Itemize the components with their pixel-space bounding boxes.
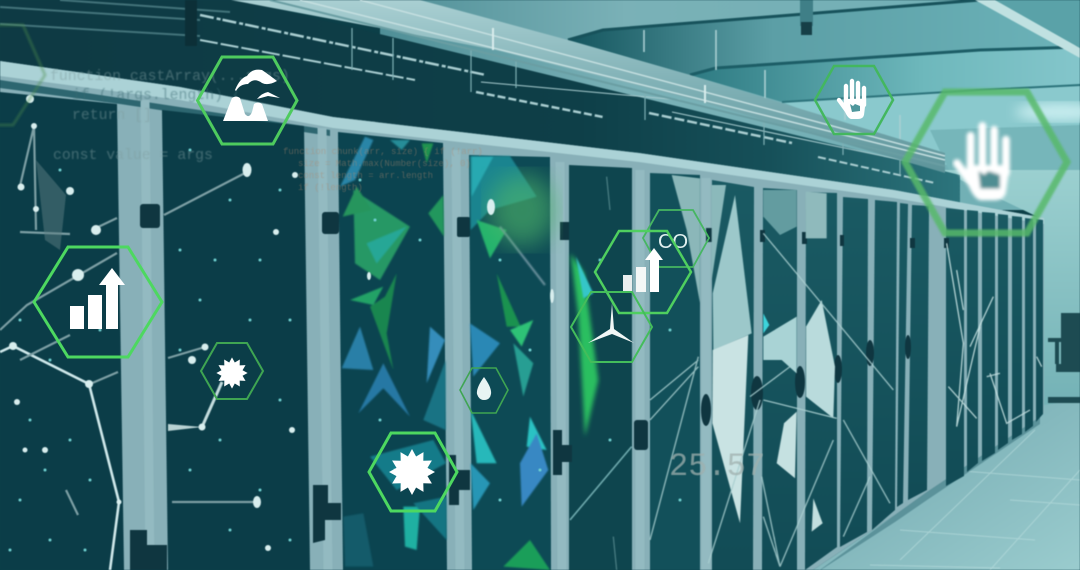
icon: sun hexagon large <box>369 433 457 511</box>
cable tray <box>231 0 945 173</box>
cabinet panel 1 <box>0 92 124 570</box>
code text overlay: return [] <box>72 108 152 124</box>
polygon art: panel 3 shards <box>340 137 447 567</box>
small code block: if (!length) <box>298 183 363 193</box>
constellation: stars and lines <box>0 95 682 570</box>
faded hexagon top left <box>0 25 45 125</box>
top left beams <box>0 0 230 36</box>
dark zone under cable tray <box>0 0 960 205</box>
icon: CO hexagon <box>643 210 709 267</box>
icon: hand hexagon small <box>815 66 893 134</box>
cabinet panel 2 <box>162 110 310 570</box>
cable trays and brackets <box>200 15 940 183</box>
icon: sun hexagon small <box>201 343 263 399</box>
icon: CO hexagon: CO <box>658 231 688 253</box>
back wall <box>940 170 1080 405</box>
door handles <box>130 204 949 570</box>
icon: hand hexagon large <box>905 92 1067 233</box>
office chair silhouette <box>1048 313 1080 403</box>
code text overlay <box>50 69 290 164</box>
small code block <box>283 147 483 193</box>
polygon art: panel 4 shards <box>470 156 550 570</box>
far cabinet panels <box>712 180 1043 570</box>
code text overlay: if (!args.length) { <box>72 88 241 104</box>
green glow on panel 4 <box>488 174 556 246</box>
icon: wind turbine hexagon <box>571 292 652 362</box>
polygon art: panel 5 streaks <box>570 177 632 570</box>
number readout: 25.57 <box>669 448 765 485</box>
small code block: size = Math.max(Number(size), 0) <box>298 159 471 169</box>
polygon art: pale shards on far cabinets <box>650 175 1042 567</box>
code text overlay: function castArray(...args) <box>50 69 290 85</box>
cabinet panel 3 <box>338 132 447 570</box>
cabinet panel 4 <box>469 155 551 570</box>
icon: water drop hexagon <box>460 368 508 413</box>
cabinet panel 6 <box>650 173 700 570</box>
icon: factory hexagon <box>198 57 297 144</box>
code text overlay: const value = args <box>53 148 213 164</box>
ceiling background <box>380 0 1080 210</box>
icon: bar chart hexagon medium <box>595 231 691 313</box>
icon: bar chart hexagon large <box>34 247 162 357</box>
floor <box>813 400 1080 570</box>
small code block: const length = arr.length <box>298 171 433 181</box>
cabinet panel 5 <box>569 165 632 570</box>
small code block: function chunk(arr, size) { if (!arr) <box>283 147 483 157</box>
